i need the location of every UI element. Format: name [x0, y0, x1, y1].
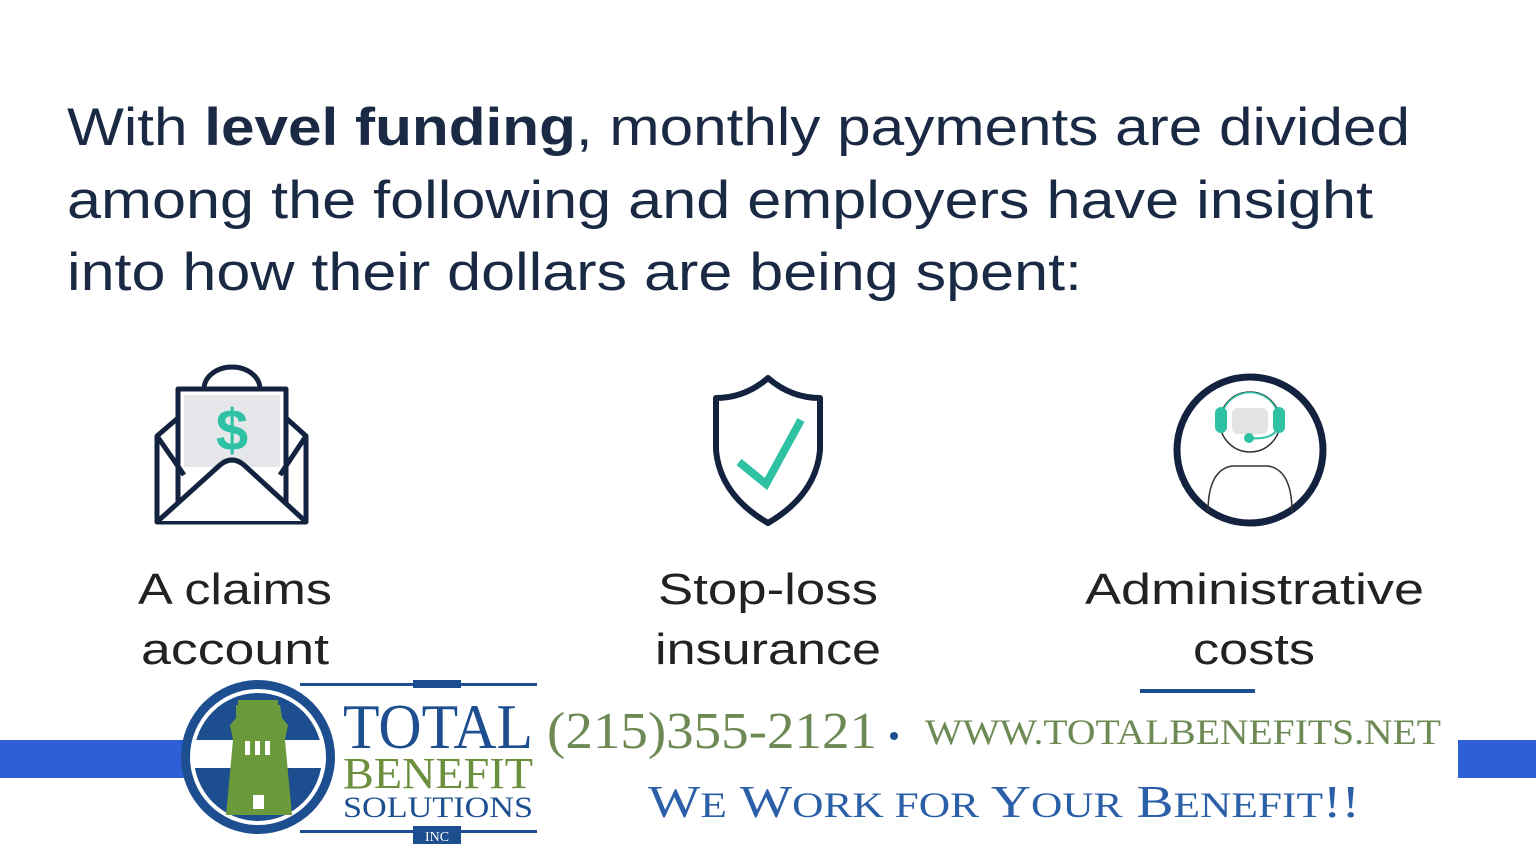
icon: envelope with dollar: $	[216, 398, 248, 463]
logo: BENEFIT	[343, 749, 533, 798]
phone and website	[547, 703, 1441, 760]
title: into how their dollars are being spent:	[67, 243, 1082, 302]
label: administrative costs: Administrative	[1085, 565, 1424, 614]
icon: envelope with dollar	[157, 367, 306, 522]
label: stop-loss insurance	[655, 565, 881, 674]
title	[67, 98, 1410, 302]
label: administrative costs	[1085, 565, 1424, 674]
logo	[181, 680, 537, 845]
icon: shield with check	[716, 378, 820, 523]
label: stop-loss insurance: insurance	[655, 625, 881, 674]
label: claims account: account	[141, 625, 329, 674]
logo: SOLUTIONS	[343, 791, 533, 824]
footer bars	[0, 740, 1536, 778]
title: With level funding , monthly payments are divided	[67, 98, 1410, 157]
logo: TOTAL	[343, 691, 533, 762]
logo: INC	[425, 830, 449, 845]
slogan: WE W ORK FOR YOUR BENEFIT !!	[648, 776, 1360, 827]
icon: admin person with headset	[1177, 377, 1323, 523]
phone and website: (215)355-2121	[547, 703, 877, 760]
label: claims account: A claims	[138, 565, 332, 614]
label: administrative costs: costs	[1193, 625, 1315, 674]
label: claims account	[138, 565, 332, 674]
label: stop-loss insurance: Stop-loss	[658, 565, 878, 614]
phone and website: WWW.TOTALBENEFITS.NET	[925, 712, 1441, 752]
title: among the following and employers have insight	[67, 171, 1373, 230]
